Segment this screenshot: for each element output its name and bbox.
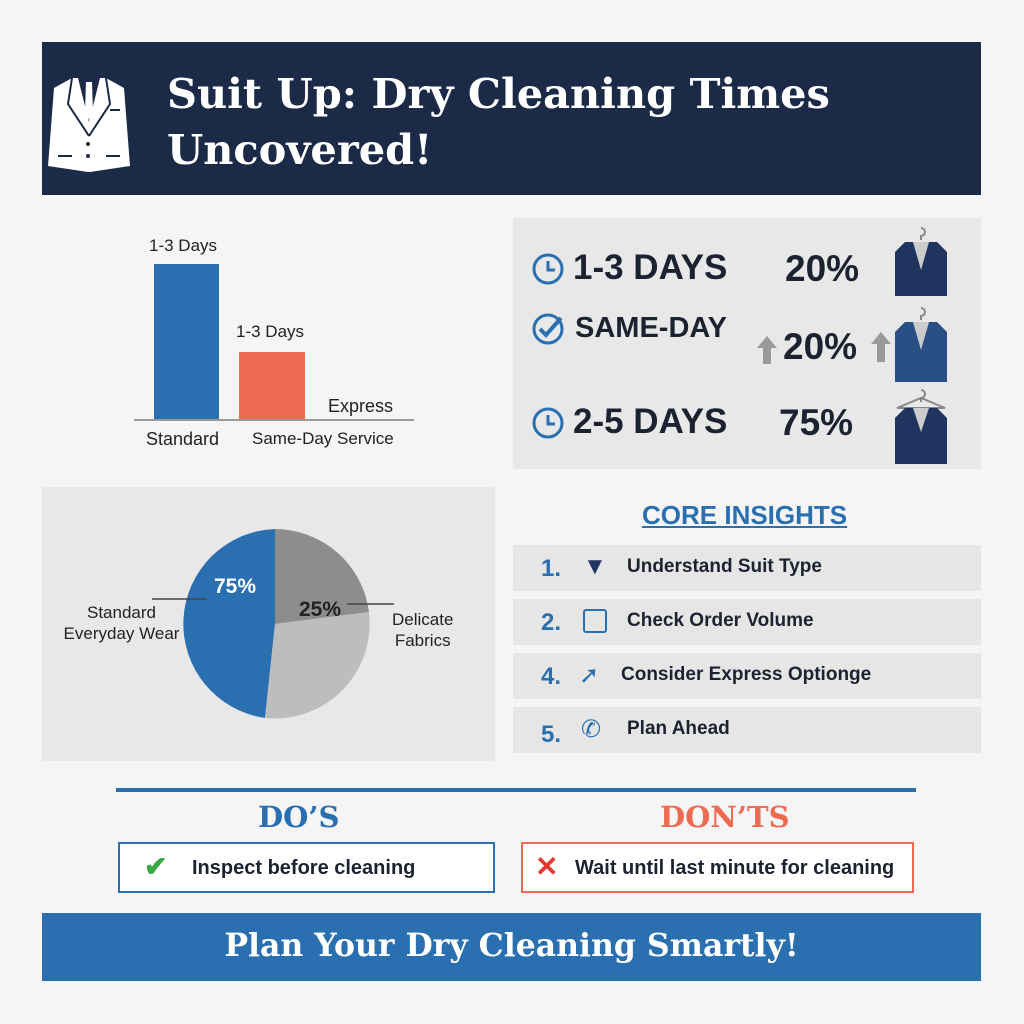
- don't box: ✕: [535, 851, 558, 882]
- footer banner: Plan Your Dry Cleaning Smartly!: [224, 927, 799, 964]
- icon: suit jacket: [48, 78, 130, 172]
- arrow up: [871, 332, 891, 362]
- do box: Inspect before cleaning: [192, 857, 415, 879]
- panel: pie chart: 25%: [299, 598, 341, 621]
- panel: timing stats: 2-5 DAYS: [573, 402, 727, 441]
- do box: ✔: [144, 851, 167, 882]
- footer banner: [42, 913, 981, 981]
- bar chart: Standard: [146, 429, 219, 449]
- icon: clock: [532, 254, 564, 284]
- panel: pie chart: [42, 487, 495, 761]
- panel: pie chart: 75%: [214, 575, 256, 598]
- bar chart: Express: [328, 396, 393, 416]
- don'ts heading: DON’TS: [660, 800, 790, 834]
- panel: pie chart: Standard: [87, 603, 156, 622]
- title: Uncovered!: [167, 125, 432, 174]
- don't box: [521, 842, 914, 893]
- panel: timing stats: 20%: [785, 248, 859, 289]
- bar chart: [134, 236, 414, 449]
- insight rows: Plan Ahead: [627, 718, 730, 739]
- do's heading: DO’S: [258, 800, 339, 834]
- bar chart: 1-3 Days: [236, 322, 304, 341]
- insight rows: ➚: [579, 662, 599, 689]
- icon: check: [532, 314, 564, 344]
- bar chart: Same-Day Service: [252, 429, 394, 448]
- insight rows: [513, 545, 981, 753]
- panel: timing stats: 75%: [779, 402, 853, 443]
- insight rows: Understand Suit Type: [627, 556, 822, 577]
- insight rows: ▼: [583, 553, 607, 580]
- arrow up: [757, 336, 777, 364]
- bar chart: 1-3 Days: [149, 236, 217, 255]
- insight rows: 2.: [541, 609, 561, 636]
- panel: timing stats: 1-3 DAYS: [573, 248, 727, 287]
- title: [167, 69, 830, 174]
- panel: pie chart: Delicate: [392, 610, 453, 629]
- icon: clock: [532, 408, 564, 438]
- insight rows: 1.: [541, 555, 561, 582]
- insight rows: Consider Express Optionge: [621, 664, 871, 685]
- insight rows: 4.: [541, 663, 561, 690]
- panel: pie chart: Fabrics: [395, 631, 451, 650]
- panel: timing stats: SAME-DAY: [575, 312, 727, 344]
- title: Suit Up: Dry Cleaning Times: [167, 69, 830, 118]
- insight rows: Check Order Volume: [627, 610, 814, 631]
- divider: [116, 788, 916, 792]
- insight rows: 5.: [541, 721, 561, 748]
- insight rows: ✆: [581, 716, 601, 743]
- do box: [118, 842, 495, 893]
- header banner: [42, 42, 981, 195]
- icons: suits: [895, 227, 947, 464]
- panel: timing stats: [513, 218, 981, 469]
- panel: timing stats: 20%: [783, 326, 857, 367]
- don't box: Wait until last minute for cleaning: [575, 857, 894, 879]
- panel: pie chart: Everyday Wear: [64, 624, 179, 643]
- heading: core insights: CORE INSIGHTS: [642, 500, 847, 530]
